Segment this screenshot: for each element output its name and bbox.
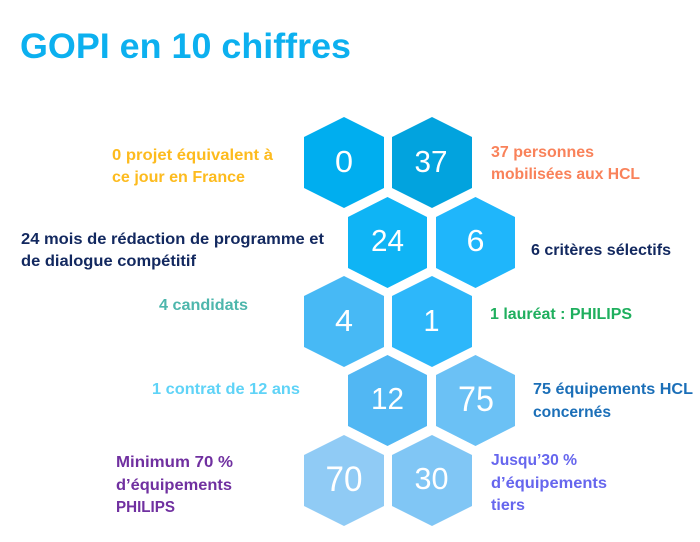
hexagon: 24: 24 [371, 223, 404, 258]
hexagon: 4: 4 [335, 303, 353, 338]
hexagon: 6 [436, 197, 515, 288]
label: 0 projet [112, 147, 273, 186]
label: 6 critères: 6 critères sélectifs [531, 242, 671, 259]
label: minimum 70 % [116, 454, 233, 516]
label: 37 personnes [491, 144, 640, 183]
label: 24 mois: 24 mois de rédaction de programme et [21, 231, 325, 248]
hexagon: 37: 37 [414, 144, 448, 179]
title: GOPI en 10 chiffres [20, 27, 351, 66]
label: minimum 70 %: PHILIPS [116, 499, 175, 516]
label: 75 équipements: concernés [533, 404, 611, 421]
label: 75 équipements: 75 équipements HCL [533, 381, 693, 398]
hexagon: 4 [304, 276, 384, 367]
label: jusqu'30 %: tiers [491, 497, 525, 514]
label: jusqu'30 %: Jusqu’30 % [491, 452, 577, 469]
hexagon: 37 [392, 117, 472, 208]
label: minimum 70 %: Minimum 70 % [116, 454, 233, 471]
label: 37 personnes: 37 personnes [491, 144, 594, 161]
hexagon: 0: 0 [335, 144, 353, 179]
label: 4 candidats: 4 candidats [159, 297, 248, 314]
label: 1 lauréat: 1 lauréat : PHILIPS [490, 306, 632, 323]
label: jusqu'30 % [491, 452, 607, 514]
label: minimum 70 %: d’équipements [116, 477, 232, 494]
label: 37 personnes: mobilisées aux HCL [491, 166, 640, 183]
label: 75 équipements [533, 381, 693, 421]
hexagon: 30 [392, 435, 472, 526]
label: 24 mois [21, 231, 325, 270]
hexagon: 75: 75 [458, 380, 494, 419]
hexagon: 12: 12 [371, 381, 404, 416]
hexagon: 75 [436, 355, 515, 446]
hexagon: 12 [348, 355, 427, 446]
hexagon: 6: 6 [466, 223, 484, 258]
hexagon: 24 [348, 197, 427, 288]
hexagon: 70: 70 [326, 460, 362, 499]
hexagon: 30: 30 [414, 461, 448, 496]
hexagon: 70 [304, 435, 384, 526]
label: 0 projet: ce jour en France [112, 169, 245, 186]
label: 24 mois: de dialogue compétitif [21, 253, 197, 270]
hexagon: 0 [304, 117, 384, 208]
hexagon: 1 [392, 276, 472, 367]
label: 0 projet: 0 projet équivalent à [112, 147, 273, 164]
label: 1 contrat: 1 contrat de 12 ans [152, 381, 300, 398]
label: jusqu'30 %: d’équipements [491, 475, 607, 492]
hexagon: 1: 1 [424, 303, 440, 338]
